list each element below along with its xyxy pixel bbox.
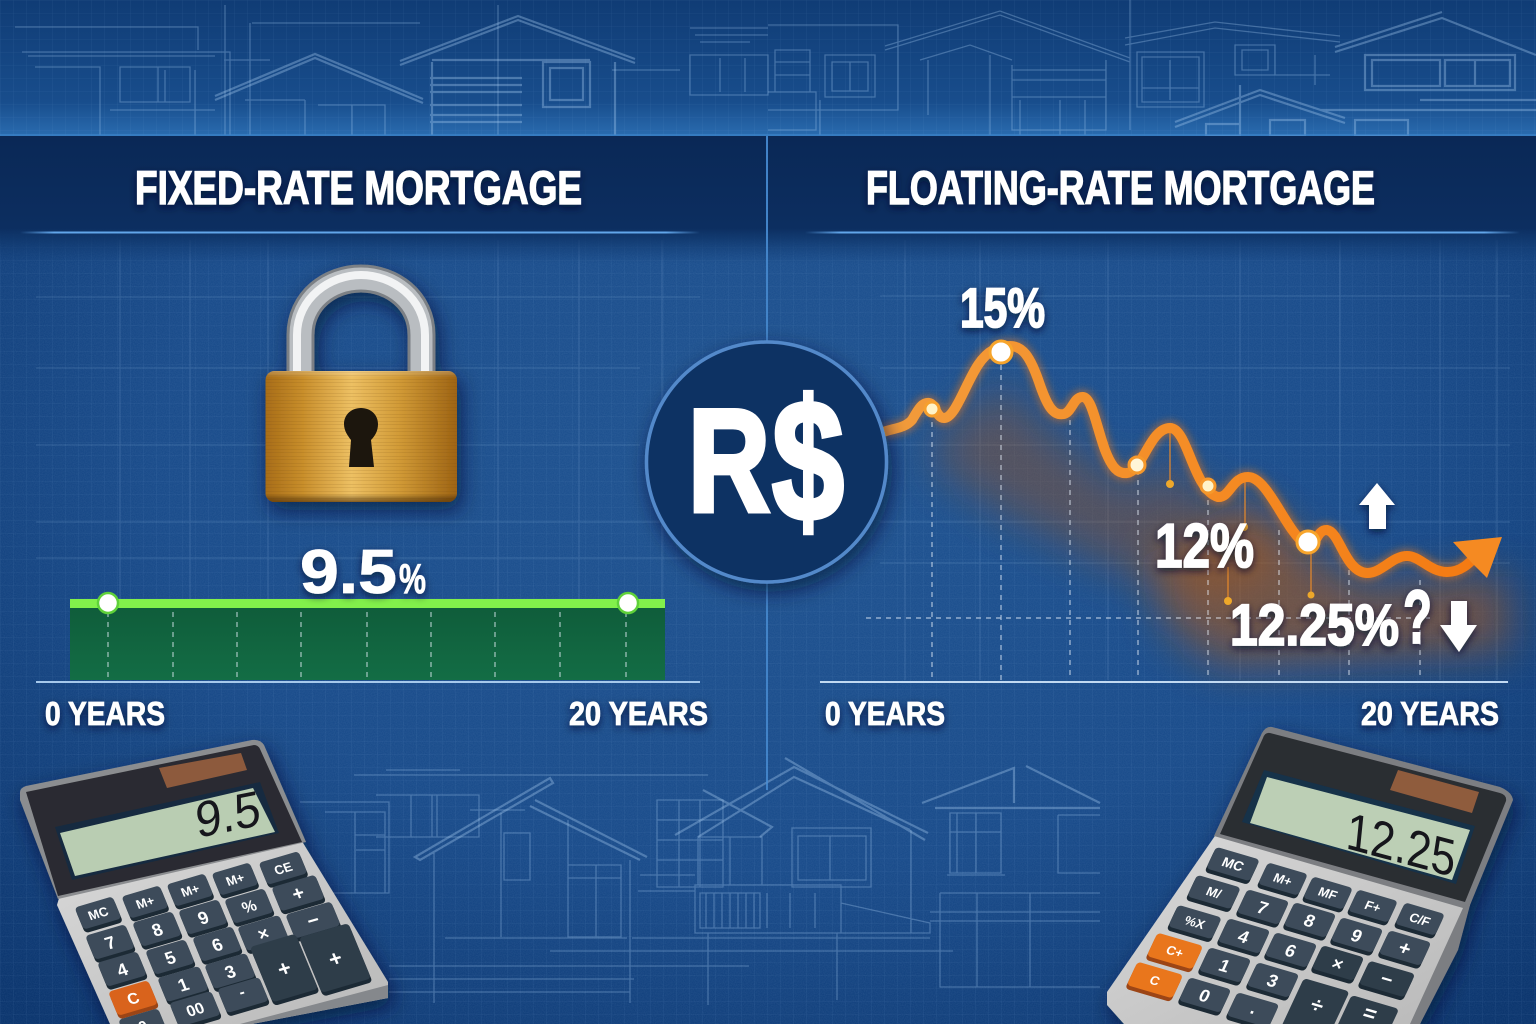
baseline: fixed chart: [36, 681, 700, 683]
calculator keys: 6: [209, 934, 226, 956]
calculator keys: %X: [1182, 913, 1208, 932]
calculator keys: 8: [1301, 910, 1319, 931]
arrow: down: [1440, 601, 1477, 652]
calculator keys: 3: [1264, 970, 1282, 991]
calculator keys: C+: [1164, 942, 1186, 961]
left heading rule: [20, 232, 700, 234]
calculator: left showing 9.5: [20, 740, 388, 1024]
calculator keys: C/F: [1407, 910, 1433, 929]
calculator keys: ×: [1328, 953, 1347, 974]
calculator keys: MC: [86, 904, 111, 923]
calculator keys: 5: [162, 947, 179, 969]
calculator keys: ×: [255, 923, 272, 945]
calculator keys: 1: [1216, 955, 1234, 976]
panel: fixed-rate header band: [0, 136, 766, 264]
axis label: 20 years left: 20 YEARS: [569, 695, 708, 732]
arrow: up: [1359, 483, 1395, 529]
calculator keys: MF: [1316, 884, 1340, 903]
calculator keys: -: [236, 984, 248, 1001]
calculator keys: M/: [1204, 884, 1224, 901]
badge: R$ currency: R: [688, 379, 770, 542]
calculator keys: M+: [224, 870, 247, 889]
badge: R$ currency: $: [772, 365, 844, 557]
calculator keys: 4: [114, 959, 131, 981]
calculator keys: C: [1147, 972, 1162, 989]
calculator keys: 1: [175, 974, 192, 996]
centre divider line: [766, 136, 768, 790]
axis label: 20 years right: 20 YEARS: [1361, 695, 1499, 732]
calculator keys: C: [125, 990, 143, 1009]
calculator keys: [74, 851, 373, 1024]
calculator keys: %: [240, 897, 260, 917]
question mark: ?: [1403, 575, 1432, 660]
calculator keys: 7: [102, 932, 119, 954]
calculator keys: [1125, 847, 1445, 1024]
value label: 12%: 12%: [1155, 512, 1254, 581]
chart: fixed rate green band: [70, 593, 665, 680]
calculator keys: M+: [1271, 870, 1295, 889]
display value 12.25: 12.25: [1344, 802, 1458, 889]
value label: 12.25%: 12.25%: [1230, 593, 1399, 658]
calculator keys: +: [273, 955, 295, 982]
calculator keys: 9: [1348, 925, 1366, 946]
calculator keys: 0: [1196, 985, 1214, 1006]
heading: fixed-rate mortgage: FIXED-RATE MORTGAGE: [135, 161, 582, 214]
display value 9.5: 9.5: [193, 780, 263, 849]
calculator keys: 8: [149, 919, 166, 941]
calculator keys: 00: [184, 1000, 207, 1021]
badge: R$ currency: [646, 342, 886, 582]
calculator keys: M+: [179, 881, 202, 900]
calculator keys: ÷: [1306, 992, 1328, 1018]
calculator keys: 9: [195, 907, 212, 929]
calculator keys: .: [1247, 998, 1260, 1018]
panel: floating-rate header band: [768, 136, 1536, 264]
calculator keys: 6: [1282, 940, 1300, 961]
value label: 15%: 15%: [960, 276, 1045, 339]
bottom blueprint houses: [300, 758, 1100, 1005]
axis label: 0 years right: 0 YEARS: [825, 695, 945, 732]
top edge highlight: [0, 134, 1536, 136]
calculator keys: M+: [134, 893, 157, 912]
calculator keys: +: [1394, 937, 1415, 960]
calculator keys: +: [324, 945, 346, 972]
calculator keys: 3: [222, 961, 239, 983]
calculator keys: 7: [1254, 897, 1272, 918]
calculator: right showing 12.25: [1107, 727, 1513, 1024]
calculator keys: −: [1376, 968, 1397, 991]
calculator keys: F+: [1362, 897, 1383, 915]
top blueprint house strip: [0, 0, 1536, 136]
calculator keys: 4: [1235, 926, 1253, 947]
value label: 9.5%: %: [399, 555, 426, 602]
value label: 9.5%: 9.5: [300, 538, 397, 607]
axis label: 0 years left: 0 YEARS: [45, 695, 165, 732]
heading: floating-rate mortgage: FLOATING-RATE MORTGAGE: [866, 161, 1375, 214]
icon: gold padlock: [266, 275, 457, 502]
chart: floating rate line: [866, 341, 1512, 680]
right heading rule: [805, 232, 1520, 234]
calculator keys: +: [289, 882, 308, 906]
baseline: floating chart: [820, 681, 1508, 683]
calculator keys: CE: [272, 859, 295, 878]
calculator keys: −: [304, 909, 323, 933]
calculator keys: MC: [1219, 854, 1247, 874]
